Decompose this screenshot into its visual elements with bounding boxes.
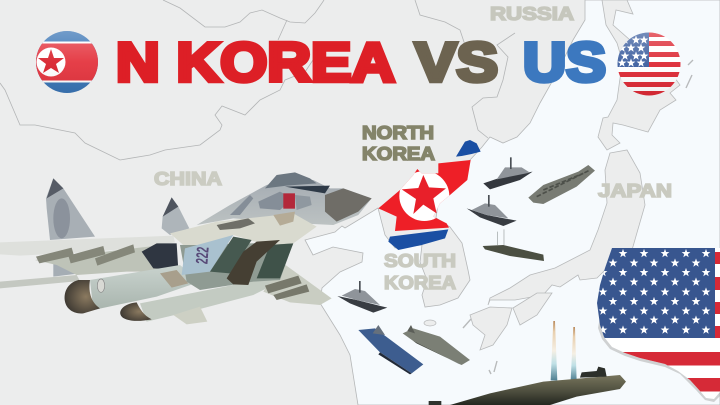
North Korea flag-shaped map (378, 140, 481, 250)
rear fin left (46, 178, 95, 240)
country labels: NORTH (362, 123, 434, 143)
title: US (523, 31, 606, 93)
left wings (0, 236, 178, 288)
right wing (263, 263, 332, 305)
warships near Korea (337, 157, 595, 374)
country labels: SOUTH (384, 251, 456, 271)
country labels: CHINA (154, 169, 222, 189)
country labels: KOREA (362, 144, 435, 164)
destroyer middle (467, 195, 517, 226)
title: N KOREA (116, 31, 395, 93)
fuselage (197, 178, 372, 225)
rear fin right (162, 197, 189, 235)
nose radome (325, 188, 372, 222)
large submarine (429, 367, 626, 405)
cockpit canopy (265, 172, 330, 193)
North Korea flag icon (36, 31, 98, 93)
carrier top right (528, 165, 595, 204)
tail number: 222 (192, 246, 212, 265)
grey aircraft carrier (403, 325, 470, 365)
title: VS (415, 31, 498, 93)
title (116, 31, 606, 93)
country labels: KOREA (384, 273, 456, 293)
small submarine (483, 229, 544, 261)
country labels: RUSSIA (490, 4, 574, 24)
US flag-shaped map (595, 245, 720, 405)
engine nacelles (65, 265, 280, 324)
destroyer top (483, 157, 533, 189)
US flag icon (617, 32, 681, 96)
missile launch trails (551, 321, 577, 380)
destroyer lower (337, 281, 387, 313)
air intakes (210, 237, 293, 285)
lower fuselage fill (180, 242, 293, 290)
country labels: JAPAN (598, 181, 672, 201)
blue aircraft carrier (358, 325, 423, 374)
country labels (154, 4, 672, 293)
fighter jet (0, 172, 372, 324)
